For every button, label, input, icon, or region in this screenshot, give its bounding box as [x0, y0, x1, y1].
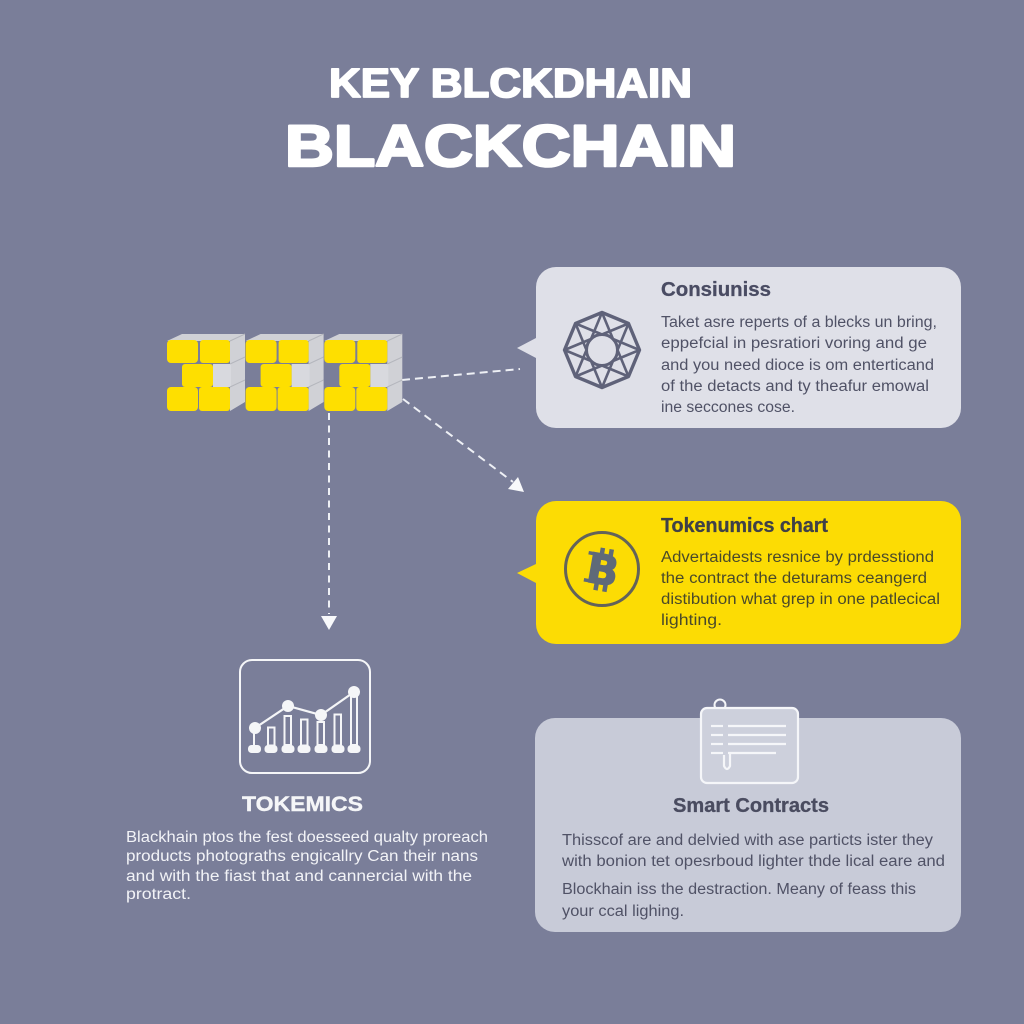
smart contracts body text: Thisscof are and delvied with ase particts ister they	[562, 832, 933, 849]
smart contracts body text: with bonion tet opesrboud lighter thde lical eare and	[561, 853, 945, 870]
icon: octagonal star	[564, 312, 640, 388]
tokenomics body text: the contract the deturams ceangerd	[661, 570, 927, 587]
title	[285, 60, 736, 179]
icon: bitcoin coin	[566, 532, 638, 606]
smart contracts card background	[535, 718, 961, 932]
block group 1	[167, 334, 245, 411]
arrow: blocks to consensus card	[402, 369, 520, 380]
tokenomics body text: Advertaidests resnice by prdesstiond	[661, 549, 934, 566]
tokenomics body text	[661, 549, 940, 629]
tokenomics card background	[517, 501, 961, 644]
tokemics heading: TOKEMICS	[242, 793, 363, 816]
tokemics body text	[126, 829, 488, 903]
smart contracts heading: Smart Contracts	[673, 795, 829, 817]
tokemics body text: and with the fiast that and cannercial with the	[126, 868, 472, 885]
arrow: blocks to tokemics section	[321, 413, 337, 630]
tokenomics body text: lighting.	[661, 612, 722, 629]
consensus body text: and you need dioce is om enterticand	[661, 357, 934, 374]
tokemics body text: Blackhain ptos the fest doesseed qualty proreach	[126, 829, 488, 846]
tokenomics body text: distibution what grep in one patlecical	[661, 591, 940, 608]
arrow: blocks to tokenomics card	[403, 399, 524, 492]
consensus card background	[517, 267, 961, 428]
consensus body text: eppefcial in pesratiori voring and ge	[661, 335, 927, 352]
panel: tokenomics chart	[517, 501, 961, 644]
icon: line and bar chart	[240, 660, 370, 773]
block group 2	[246, 334, 324, 411]
title: BLACKCHAIN	[285, 114, 736, 179]
title: KEY BLCKDHAIN	[329, 60, 692, 106]
panel: smart contracts	[535, 700, 961, 932]
tokenomics heading: Tokenumics chart	[661, 515, 828, 537]
consensus heading: Consiuniss	[661, 279, 771, 301]
consensus body text: ine seccones cose.	[661, 399, 795, 416]
smart contracts body text: Blockhain iss the destraction. Meany of feass this	[562, 881, 916, 898]
panel: consensus	[517, 267, 961, 428]
smart contracts body text: your ccal lighing.	[562, 903, 684, 920]
smart contracts body text	[561, 832, 945, 920]
blockchain blocks illustration	[167, 334, 402, 411]
tokemics body text: products photograths engicallry Can their nans	[126, 848, 478, 865]
panel: tokemics	[126, 660, 488, 903]
icon: bitcoin coin: B	[583, 544, 622, 597]
tokemics body text: protract.	[126, 886, 191, 903]
consensus body text: of the detacts and ty theafur emowal	[661, 378, 929, 395]
icon: contract document	[701, 700, 798, 783]
consensus body text: Taket asre reperts of a blecks un bring,	[661, 314, 937, 331]
consensus body text	[661, 314, 937, 416]
block group 3	[324, 334, 402, 411]
